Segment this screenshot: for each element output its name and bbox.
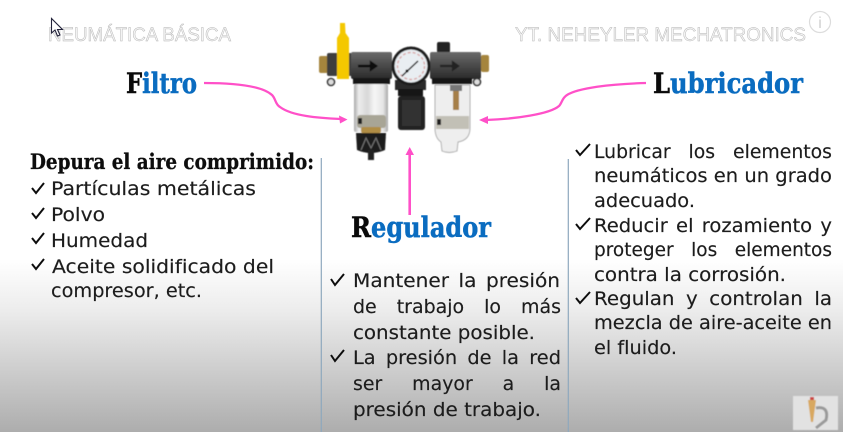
panel: regulador text: constante posible. <box>353 322 535 344</box>
right brass fitting <box>481 55 489 72</box>
left brass fitting <box>319 56 328 73</box>
filtro checklist: Humedad <box>51 230 148 252</box>
heading: Lubricador: Lubricador <box>653 67 804 100</box>
filtro checklist <box>32 178 274 302</box>
left bowl <box>354 84 388 160</box>
arrow: regulador to regulator <box>406 147 414 215</box>
panel: lubricador text: Regulan y controlan la <box>594 288 832 310</box>
heading: Filtro: Filtro <box>126 67 197 100</box>
filtro checklist: Aceite solidificado del <box>52 256 274 278</box>
panel: regulador text: ser mayor a la <box>353 373 561 395</box>
filtro subheading: Depura el aire comprimido: <box>30 149 314 174</box>
panel: lubricador text: neumáticos en un grado <box>594 165 832 187</box>
icon: info <box>810 12 830 32</box>
divider left <box>321 158 322 432</box>
panel: lubricador text: mezcla de aire-aceite en <box>594 312 832 334</box>
panel: lubricador text: el fluido. <box>594 337 677 359</box>
panel: regulador text: presión de trabajo. <box>353 399 541 421</box>
thumbnail: video logo <box>793 396 838 430</box>
panel: lubricador text: Reducir el rozamiento y <box>594 215 832 237</box>
pressure gauge <box>392 46 430 86</box>
panel: lubricador text: Lubricar los elementos <box>594 141 832 163</box>
yellow valve <box>337 23 349 79</box>
panel: lubricador text: proteger los elementos <box>594 239 832 261</box>
panel: lubricador text <box>576 141 832 359</box>
filtro checklist: Partículas metálicas <box>51 178 256 200</box>
arrow: lubricador to lubricator bowl <box>479 83 646 124</box>
icon: info: i <box>818 15 822 32</box>
icon: mouse cursor <box>52 18 62 36</box>
watermark: NEUMÁTICA BÁSICA: NEUMÁTICA BÁSICA <box>48 23 231 46</box>
panel: regulador text <box>331 270 561 421</box>
right manifold <box>430 42 481 86</box>
panel: regulador text: de trabajo lo más <box>353 296 561 318</box>
right bowl <box>435 85 470 152</box>
illustration: air service unit <box>319 23 489 160</box>
heading: Regulador: Regulador <box>351 211 492 244</box>
divider right <box>568 159 569 432</box>
left manifold <box>327 52 392 86</box>
arrow: filtro to filter bowl <box>204 83 348 124</box>
panel: lubricador text: adecuado. <box>594 190 695 212</box>
watermark: YT. NEHEYLER MECHATRONICS: YT. NEHEYLER MECHATRONICS <box>515 24 806 46</box>
filtro checklist: Polvo <box>51 204 105 226</box>
regulator body <box>395 80 426 130</box>
panel: regulador text: La presión de la red <box>353 347 561 369</box>
panel: lubricador text: contra la corrosión. <box>594 264 786 286</box>
panel: filtro text <box>30 149 314 302</box>
panel: regulador text: Mantener la presión <box>353 270 560 292</box>
filtro checklist: compresor, etc. <box>51 280 202 302</box>
